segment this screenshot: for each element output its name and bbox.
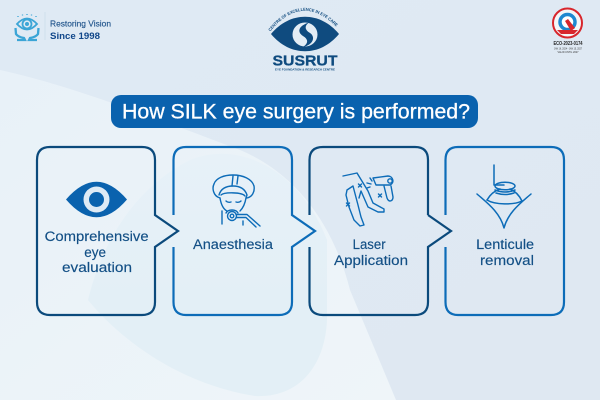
panel: anaesthesia [174, 147, 315, 315]
logo: restoring vision: Since 1998 [50, 31, 100, 42]
icon: eye [66, 182, 127, 217]
badge: accreditation [553, 8, 583, 54]
label: removal [480, 253, 534, 268]
card outline [446, 147, 564, 315]
icon: Susrut eye [271, 17, 339, 51]
icon: laser on legs [343, 173, 393, 226]
icon: seal [553, 8, 582, 38]
badge: accreditation: ECO-2023-0174 [554, 41, 583, 47]
card outline with arrow [310, 147, 451, 315]
title banner [111, 95, 478, 128]
label: Application [334, 253, 408, 268]
label: eye [84, 245, 106, 260]
badge: accreditation: VALID UNTIL 2027 [558, 50, 579, 54]
logo: Susrut [268, 8, 339, 72]
card outline with arrow [174, 147, 315, 315]
label: Comprehensive [45, 229, 149, 244]
title banner: How SILK eye surgery is performed? [122, 100, 470, 124]
panel: laser application [310, 147, 451, 315]
label: Anaesthesia [193, 237, 274, 252]
label: evaluation [62, 260, 132, 275]
label: Lenticule [476, 237, 534, 252]
logo: Susrut: CENTRE OF EXCELLENCE IN EYE CARE [268, 8, 338, 31]
panel: comprehensive eye evaluation [37, 147, 178, 315]
logo: Susrut: EYE FOUNDATION & RESEARCH CENTRE [275, 68, 335, 72]
logo: Susrut: SUSRUT [272, 54, 338, 70]
card outline with arrow [37, 147, 178, 315]
label: Laser [353, 237, 386, 252]
icon: lens and cone [477, 165, 531, 228]
logo: restoring vision [16, 12, 111, 42]
icon: patient with mask [213, 175, 260, 227]
badge: accreditation: JAN 16, 2024 - JAN 15, 2027 [554, 46, 582, 50]
panel: lenticule removal [446, 147, 564, 315]
logo: restoring vision: Restoring Vision [50, 18, 111, 28]
icon: eye in hands [16, 14, 38, 40]
